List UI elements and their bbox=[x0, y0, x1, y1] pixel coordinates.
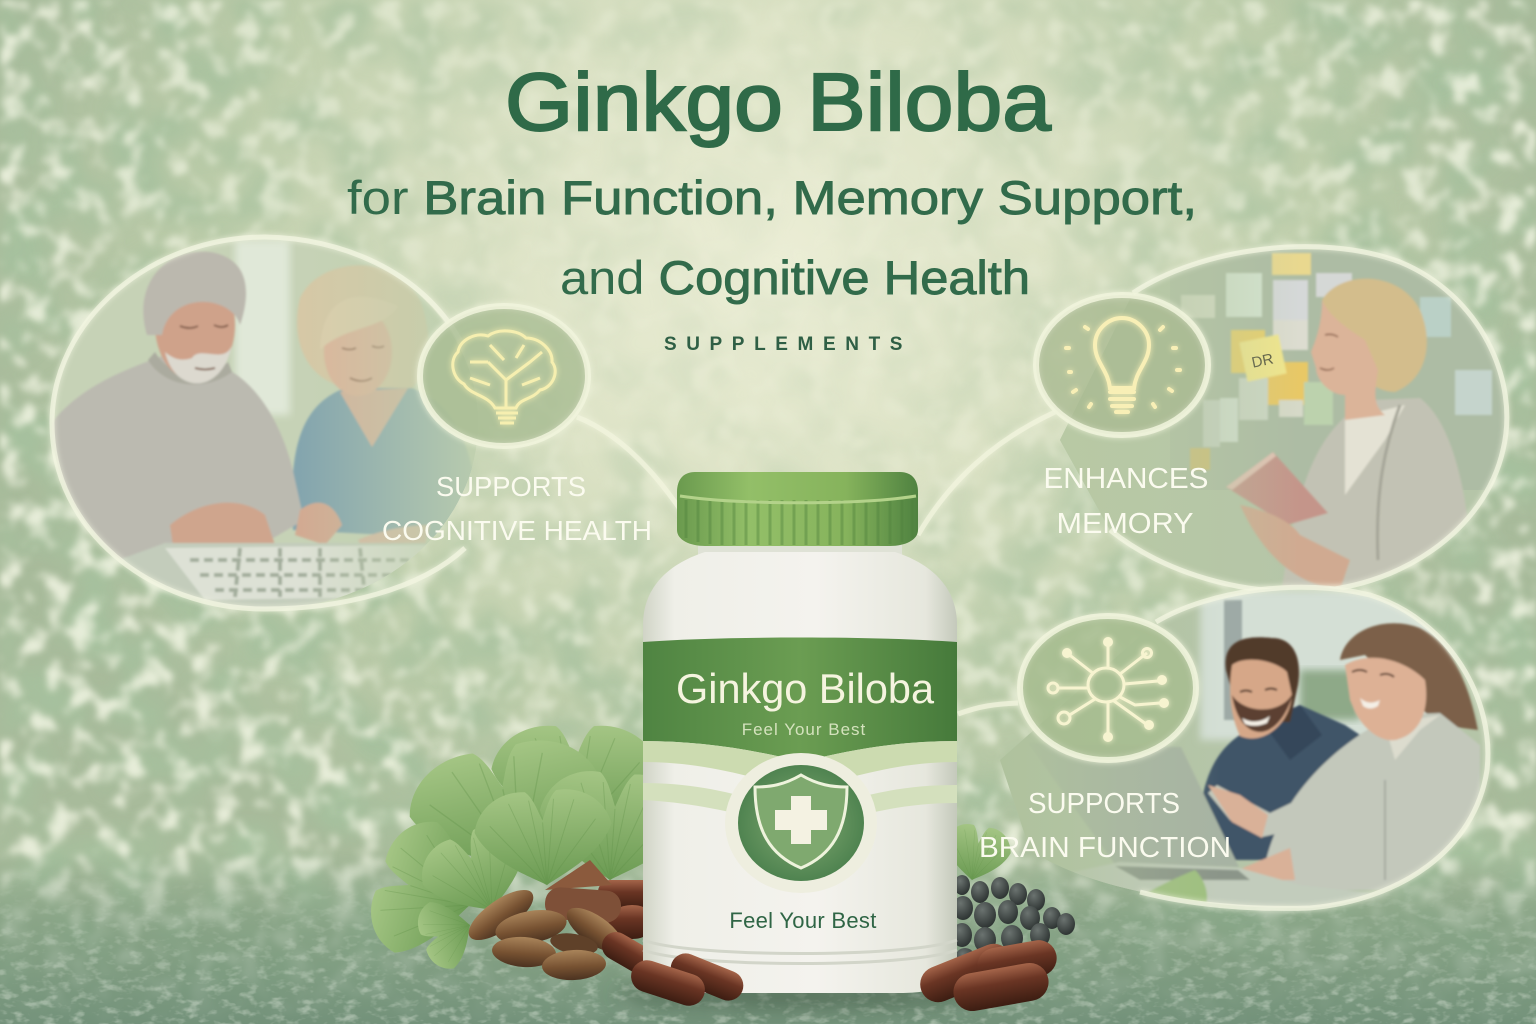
photo: woman with tablet and notes bbox=[1060, 249, 1504, 586]
photo: couple at a laptop bbox=[1000, 590, 1485, 906]
green label band bbox=[643, 638, 957, 762]
label: supports brain function: BRAIN FUNCTION bbox=[979, 832, 1231, 864]
hands bbox=[170, 502, 274, 544]
man bbox=[50, 355, 304, 570]
bottle shadow bbox=[615, 981, 985, 1009]
ginkgo leaf behind bottle right bbox=[939, 820, 1014, 886]
capsules left bbox=[461, 860, 673, 987]
bottom tagline: Feel Your Best bbox=[729, 908, 877, 933]
man head bbox=[1226, 637, 1299, 722]
icon circle: brain bbox=[420, 306, 588, 446]
label: enhances memory bbox=[1044, 463, 1208, 540]
title line: Ginkgo Biloba: Ginkgo Biloba bbox=[505, 57, 1051, 148]
laptop bbox=[1028, 743, 1239, 867]
product name: Ginkgo Biloba bbox=[676, 665, 935, 712]
label: enhances memory: MEMORY bbox=[1056, 508, 1194, 540]
supplement bottle bbox=[615, 472, 985, 1009]
bubble outline bbox=[1140, 587, 1488, 908]
subtitle line 1: for Brain Function, Memory Support, bbox=[347, 171, 1197, 224]
bubble outline bbox=[52, 237, 465, 609]
hands bbox=[1240, 505, 1350, 590]
note text: DR bbox=[1250, 350, 1275, 372]
category label: SUPPLEMENTS bbox=[664, 334, 912, 355]
label: supports brain function: SUPPORTS bbox=[1028, 788, 1180, 820]
subtitle line 2: and Cognitive Health bbox=[560, 251, 1030, 304]
man hoodie bbox=[1202, 704, 1360, 862]
title bbox=[347, 57, 1197, 355]
dark berries bbox=[952, 875, 1075, 968]
panel: enhances memory bbox=[1036, 235, 1530, 605]
panel: cognitive health bbox=[50, 235, 652, 615]
label: supports cognitive health: COGNITIVE HEALTH bbox=[382, 515, 652, 546]
bottle cap bbox=[677, 472, 918, 546]
connector lines bbox=[577, 412, 1055, 714]
woman head bbox=[1345, 658, 1426, 740]
ginkgo leaves bbox=[359, 726, 692, 975]
icon circle: neural network bbox=[1020, 616, 1196, 760]
label: supports cognitive health bbox=[382, 471, 652, 546]
photo: couple doing a puzzle bbox=[50, 235, 480, 615]
woman bbox=[292, 385, 480, 540]
face bbox=[1311, 300, 1385, 420]
label: supports cognitive health: SUPPORTS bbox=[436, 471, 586, 502]
cardigan bbox=[1284, 398, 1466, 585]
bubble outline bbox=[1110, 247, 1507, 592]
hair bbox=[1322, 279, 1427, 392]
book bbox=[1226, 452, 1328, 525]
bottle body bbox=[643, 552, 957, 993]
product tagline: Feel Your Best bbox=[742, 720, 866, 739]
woman hair bbox=[1340, 623, 1478, 730]
icon circle: lightbulb bbox=[1036, 295, 1208, 435]
label swoosh bbox=[643, 741, 957, 790]
woman hoodie bbox=[1262, 713, 1480, 890]
capsules front bbox=[627, 937, 1060, 1014]
label: supports brain function bbox=[979, 788, 1231, 864]
bottle base ring bbox=[643, 940, 957, 964]
woman arm and hand bbox=[1208, 770, 1360, 837]
small leaf bbox=[1110, 870, 1207, 920]
shield emblem bbox=[725, 753, 877, 893]
panel: brain function bbox=[979, 580, 1520, 920]
puzzle board bbox=[124, 542, 408, 564]
bottle neck bbox=[698, 530, 902, 570]
label: enhances memory: ENHANCES bbox=[1044, 463, 1208, 495]
